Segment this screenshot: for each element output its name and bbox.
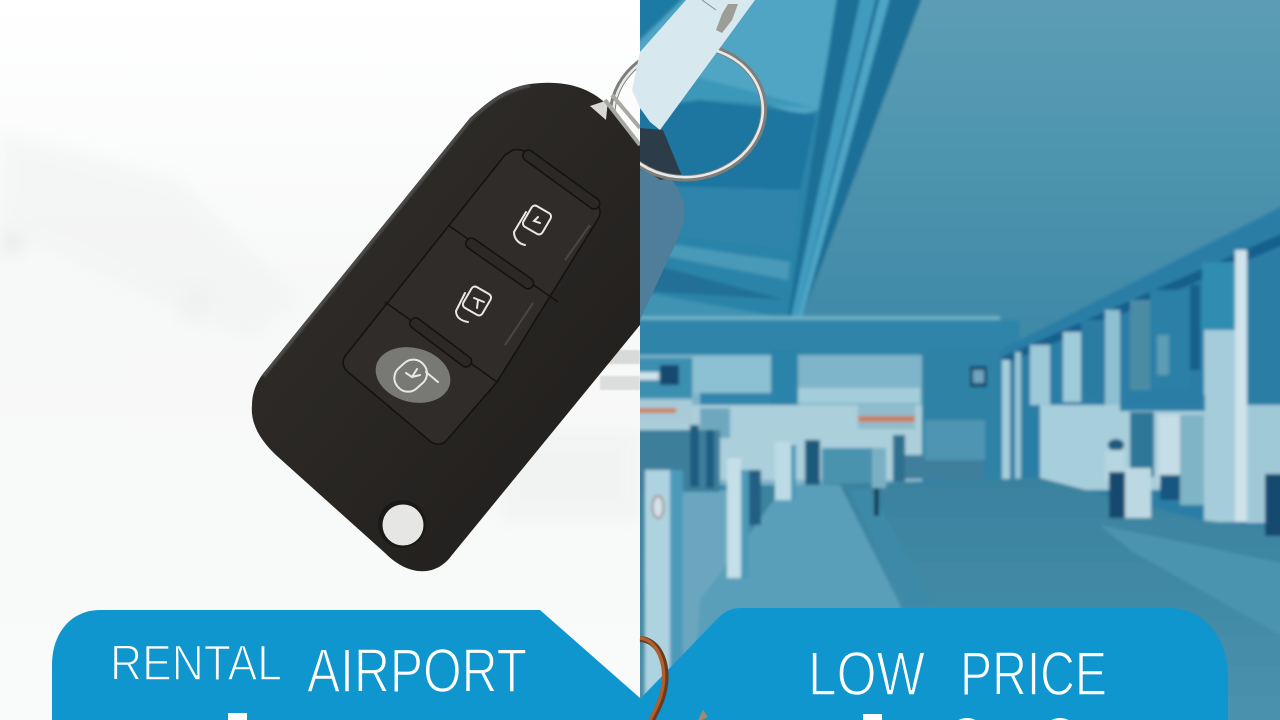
floor — [630, 478, 1280, 720]
key tag — [632, 0, 755, 130]
fob body — [252, 83, 660, 571]
icon: trunk button — [456, 285, 493, 322]
bollards and people — [630, 425, 905, 720]
ceiling beam — [787, 0, 925, 322]
key eyelet — [378, 500, 426, 548]
panel: left white background — [0, 0, 640, 720]
key ring — [604, 36, 772, 188]
panel: blue label left — [52, 610, 640, 720]
wall sign — [970, 366, 987, 387]
ceiling — [640, 0, 1280, 315]
small cable tip — [698, 710, 708, 720]
heading: low price: LOW — [808, 640, 925, 709]
key fob — [252, 0, 772, 571]
cropped glyph tops right — [863, 714, 1071, 720]
heading: rental airport: AIRPORT — [307, 637, 527, 706]
orange sign — [858, 405, 915, 429]
left sign — [630, 358, 692, 398]
counters — [822, 448, 874, 484]
heading: rental airport — [110, 635, 527, 706]
cropped glyph top left — [228, 713, 247, 720]
icon: orange cable — [640, 638, 666, 720]
icon: unlock button — [514, 204, 553, 245]
heading: rental airport: RENTAL — [110, 635, 282, 691]
heading: low price: PRICE — [960, 640, 1107, 709]
heading: low price — [808, 640, 1107, 709]
travelers and bins — [1105, 439, 1280, 536]
icon: lock button — [369, 339, 457, 411]
panel: right airport terminal photo — [630, 0, 1280, 720]
panel: blue label right — [640, 608, 1228, 720]
right wall with columns — [1000, 202, 1280, 535]
rear wall and windows — [630, 316, 1020, 485]
fob button panel — [343, 148, 602, 444]
fob extension over photo — [640, 170, 684, 320]
